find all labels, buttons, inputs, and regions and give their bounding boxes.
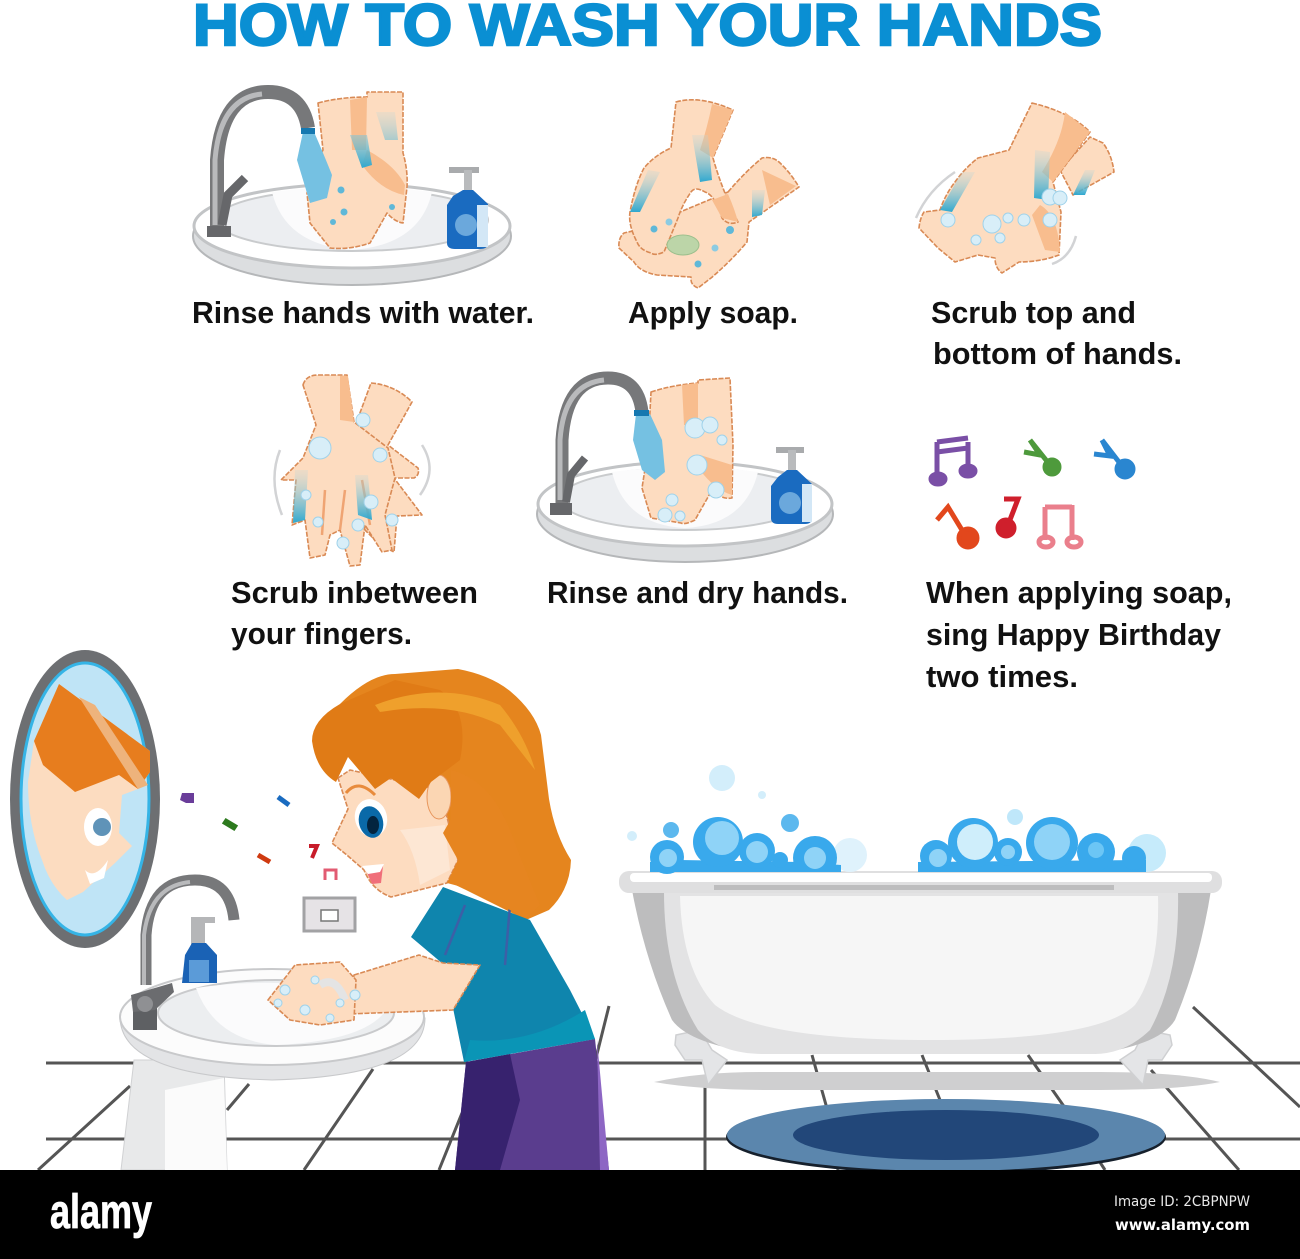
face bbox=[332, 770, 458, 897]
icon: soap pump bottle bbox=[447, 167, 488, 249]
pedestal highlight bbox=[165, 1078, 227, 1170]
label: rinse and dry: Rinse and dry hands. bbox=[547, 575, 848, 610]
footer image id: Image ID: 2CBPNPW bbox=[1114, 1194, 1250, 1210]
label: scrub between fingers: your fingers. bbox=[231, 616, 412, 651]
label: sing happy birthday: two times. bbox=[926, 659, 1078, 694]
panel: step 5 rinse and dry bbox=[537, 378, 833, 562]
bangs bbox=[312, 680, 462, 799]
tub shadow bbox=[654, 1072, 1220, 1090]
tub rim bbox=[619, 871, 1222, 893]
illustration: bathtub with bubbles bbox=[619, 765, 1222, 1174]
label: sing happy birthday: When applying soap, bbox=[926, 575, 1232, 610]
faucet spout bbox=[146, 880, 234, 985]
icon: orange note bbox=[937, 507, 977, 547]
hair highlight bbox=[375, 692, 535, 770]
panel: step 1 rinse hands with water bbox=[193, 92, 511, 285]
illustration: washbasin bbox=[120, 880, 425, 1170]
label: apply soap: Apply soap. bbox=[628, 295, 798, 330]
icon: soapy hands bbox=[642, 378, 733, 524]
icon: blue note bbox=[1094, 440, 1133, 477]
label: sing happy birthday bbox=[926, 575, 1232, 694]
icon: sink basin bbox=[193, 184, 511, 285]
tub inner shell bbox=[664, 892, 1178, 1054]
icon: hand shading and bubbles bbox=[940, 112, 1095, 252]
icon: back hand bbox=[350, 383, 422, 552]
icon: green note bbox=[1024, 440, 1059, 474]
icon: shading, soap bar and water bbox=[630, 104, 796, 268]
icon: red note bbox=[998, 499, 1018, 536]
icon: motion marks bbox=[274, 445, 430, 515]
label: sing happy birthday: sing Happy Birthday bbox=[926, 617, 1222, 652]
panel: step 4 scrub between fingers bbox=[274, 375, 430, 566]
skirt bbox=[455, 1039, 609, 1170]
icon: rinsing hands bbox=[307, 92, 407, 248]
floor tile grid bbox=[38, 1006, 1300, 1170]
panel: step 2 apply soap bbox=[619, 100, 799, 288]
footer url: www.alamy.com bbox=[1115, 1216, 1250, 1234]
label: scrub top and bottom: Scrub top and bbox=[931, 295, 1136, 330]
icon: faucet bbox=[550, 378, 642, 515]
pedestal bbox=[121, 1060, 227, 1170]
icon: water stream bbox=[633, 410, 665, 480]
hands bbox=[268, 962, 360, 1025]
basin rim bbox=[120, 969, 424, 1065]
ear bbox=[427, 775, 451, 819]
shirt bbox=[411, 887, 595, 1062]
icon: soap pump bottle bbox=[771, 447, 812, 524]
hair back bbox=[340, 669, 571, 920]
basin outer bbox=[120, 1018, 425, 1080]
footer logo: alamy bbox=[50, 1186, 152, 1239]
icon: purple note bbox=[931, 438, 975, 484]
basin bowl bbox=[158, 980, 394, 1046]
icon: water stream bbox=[297, 128, 332, 203]
tub body bbox=[632, 890, 1211, 1054]
icon: front hands bbox=[919, 103, 1090, 273]
panel: step 3 scrub top and bottom bbox=[916, 103, 1114, 273]
label: scrub top and bottom: bottom of hands. bbox=[933, 336, 1182, 371]
left bubbles bbox=[627, 765, 867, 880]
basin bowl highlight bbox=[196, 983, 392, 1045]
faucet highlight bbox=[144, 882, 190, 985]
icon: wall light switch bbox=[304, 898, 355, 931]
icon: finger lines and bubbles bbox=[293, 376, 398, 549]
label: rinse hands: Rinse hands with water. bbox=[192, 295, 534, 330]
label: scrub between fingers: Scrub inbetween bbox=[231, 575, 478, 610]
label: scrub between fingers bbox=[231, 575, 478, 651]
mirror reflection bbox=[28, 684, 150, 900]
panel: music notes bbox=[931, 438, 1133, 547]
icon: sink basin bbox=[537, 462, 833, 562]
footer bar bbox=[0, 1170, 1300, 1259]
illustration: girl washing hands bbox=[268, 669, 609, 1170]
mirror frame bbox=[10, 650, 160, 948]
illustration: wall mirror bbox=[10, 650, 160, 948]
hair lock bbox=[443, 770, 540, 918]
tub feet bbox=[675, 1030, 1172, 1085]
icon: lower hand with soap bbox=[619, 158, 799, 288]
icon: back hand bbox=[1060, 137, 1114, 195]
icon: faucet bbox=[207, 92, 308, 237]
icon: pink note bbox=[1039, 505, 1081, 547]
mirror glass bbox=[21, 663, 149, 935]
arms bbox=[348, 955, 480, 1014]
icon: upper hand bbox=[630, 100, 738, 254]
faucet handle bbox=[131, 983, 174, 1030]
tub front panel bbox=[680, 896, 1158, 1040]
label: scrub top and bottom bbox=[931, 295, 1182, 371]
soap bottle bbox=[182, 917, 217, 983]
bath rug bbox=[726, 1099, 1166, 1174]
illustration: music notes from singing bbox=[180, 793, 336, 880]
icon: motion marks bbox=[916, 172, 1076, 264]
icon: front hand bbox=[281, 375, 395, 566]
right bubbles bbox=[918, 809, 1166, 872]
